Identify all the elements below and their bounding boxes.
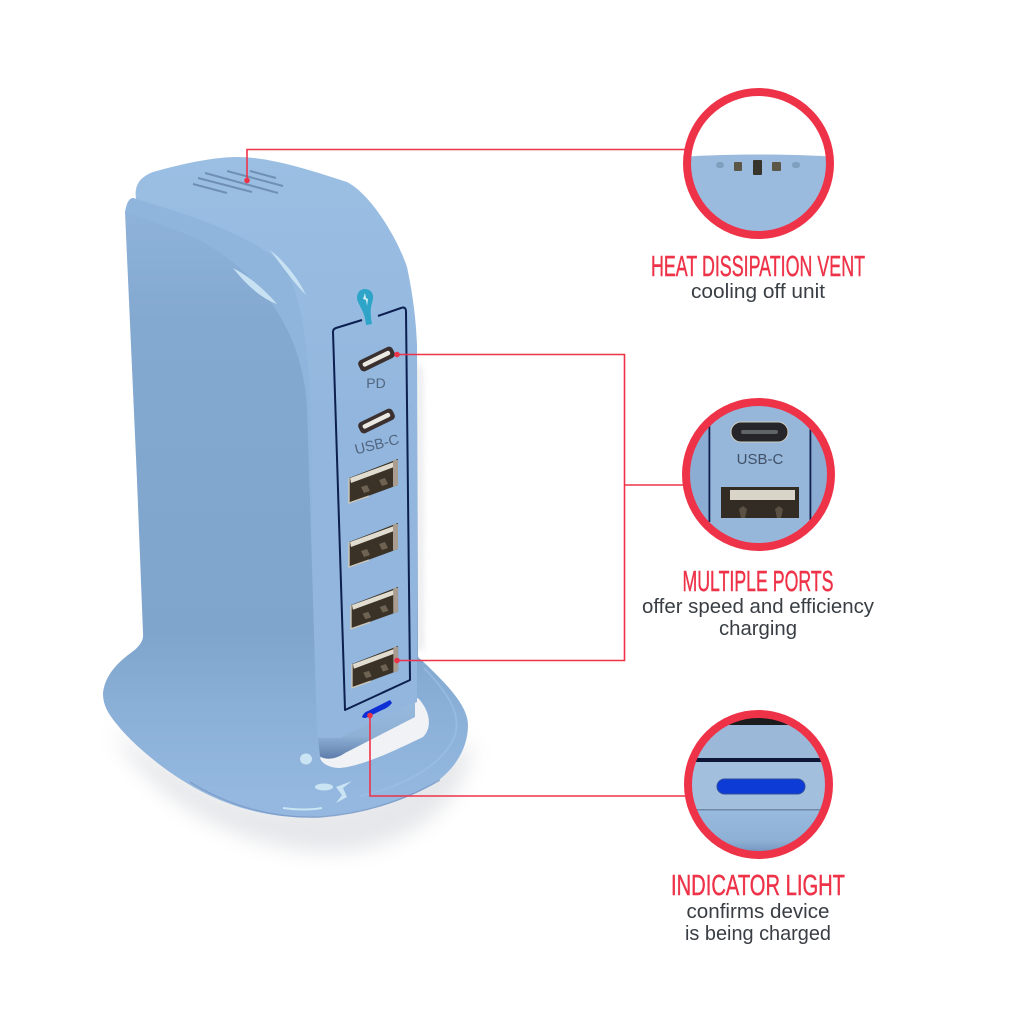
callout circle: ports detail bbox=[680, 395, 840, 555]
icon: logo bulb bbox=[357, 289, 373, 325]
port: PD USB-C bbox=[357, 345, 396, 373]
callout connector: indicator bbox=[367, 713, 686, 796]
callout circle: vent detail bbox=[683, 88, 834, 239]
callout circle: indicator detail bbox=[684, 710, 833, 859]
label: PD: PD bbox=[366, 375, 386, 391]
text: ports description: offer speed and efficiency bbox=[642, 596, 874, 618]
indicator light bbox=[362, 700, 392, 718]
gloss highlights bbox=[233, 250, 306, 304]
ground shadow bbox=[112, 730, 472, 852]
text: indicator description: confirms device bbox=[686, 901, 830, 923]
callout connector: vent bbox=[244, 150, 686, 183]
text: cooling off unit: cooling off unit bbox=[691, 281, 825, 303]
base opening bbox=[320, 698, 429, 768]
text: ports description line 2: charging bbox=[719, 618, 797, 640]
body and base silhouette bbox=[103, 199, 468, 817]
heading: indicator light: INDICATOR LIGHT bbox=[671, 870, 845, 902]
port: USB-A 1 bbox=[349, 459, 398, 503]
infographic canvas bbox=[103, 88, 874, 944]
top vent slots bbox=[193, 171, 283, 193]
product: charging tower bbox=[103, 157, 472, 852]
port panel outline bbox=[333, 308, 410, 710]
right wall shadow bbox=[416, 360, 424, 650]
shell rim bbox=[125, 198, 320, 737]
base highlights bbox=[283, 754, 352, 810]
base right ridge bbox=[360, 668, 457, 796]
heading: heat dissipation vent: HEAT DISSIPATION VENT bbox=[651, 251, 865, 283]
text: indicator description line 2: is being charged bbox=[685, 923, 831, 945]
callout circle: ports detail: USB-C bbox=[737, 451, 784, 468]
port: USB-C bbox=[357, 407, 396, 435]
port: USB-A 4 bbox=[352, 646, 398, 688]
strip lower step bbox=[318, 702, 415, 759]
port: USB-A 3 bbox=[351, 587, 398, 629]
port: USB-A 2 bbox=[349, 523, 398, 567]
label: USB-C: USB-C bbox=[353, 432, 401, 458]
top cap and front strip bbox=[136, 157, 417, 738]
callout connector: ports bbox=[394, 352, 684, 663]
heading: multiple ports: MULTIPLE PORTS bbox=[682, 566, 834, 598]
base lower edge bbox=[190, 780, 440, 817]
